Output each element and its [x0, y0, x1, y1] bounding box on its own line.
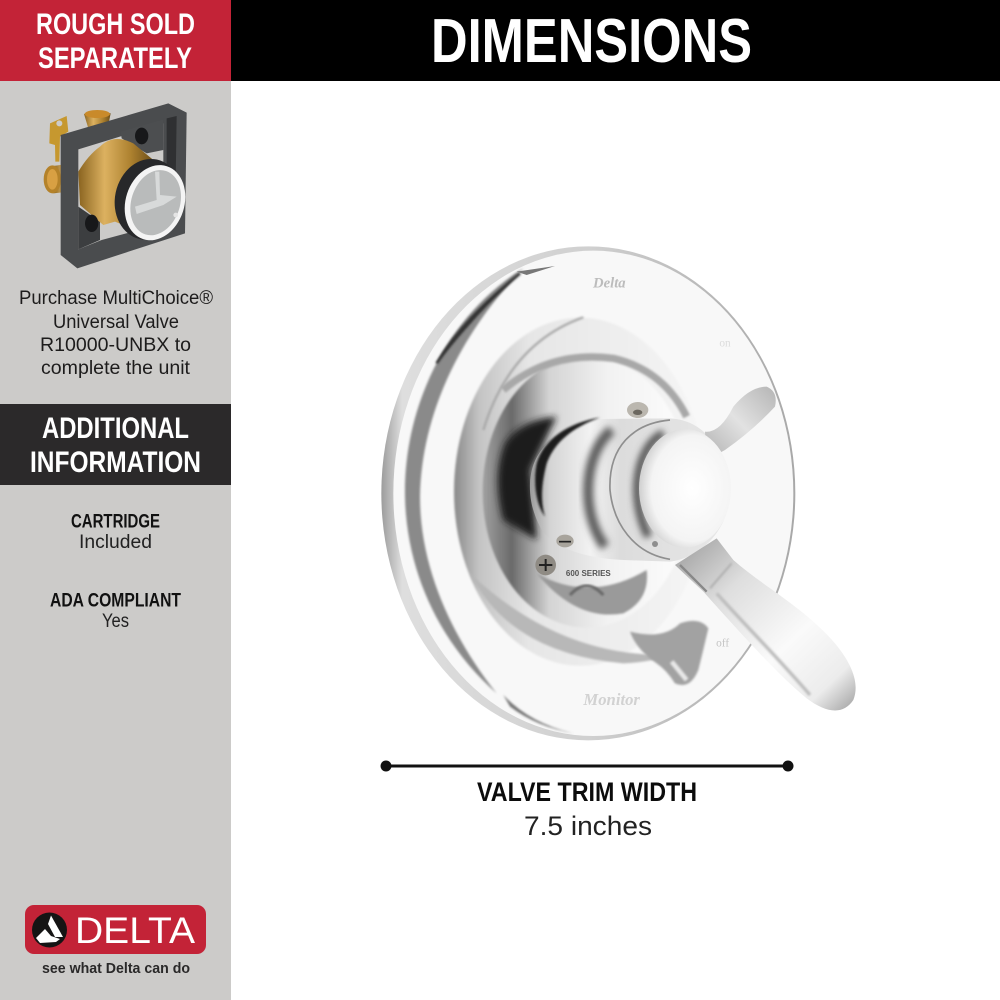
rough-in description: R10000-UNBX to — [40, 335, 191, 356]
inner ring highlight — [483, 317, 583, 430]
cup well arch — [570, 586, 603, 595]
knob small screw — [652, 541, 658, 547]
logo tagline: see what Delta can do — [42, 961, 190, 977]
valve back bracket — [49, 116, 68, 162]
banner heading line two: SEPARATELY — [38, 42, 192, 75]
dimension label: VALVE TRIM WIDTH — [477, 777, 697, 807]
logo mark — [32, 912, 67, 948]
series stamp: 600 SERIES — [566, 569, 611, 578]
spec: cartridge: CARTRIDGE — [71, 510, 160, 532]
engraved on: on — [719, 338, 731, 350]
delta logo — [25, 905, 206, 977]
lower lever — [675, 538, 856, 710]
dimension value: 7.5 inches — [524, 811, 652, 841]
barrel collar outline — [610, 420, 670, 559]
frame inner corner blocks — [78, 207, 100, 249]
faceplate face — [393, 251, 793, 736]
brass valve body — [78, 139, 153, 233]
lever neck shadow — [680, 565, 707, 592]
product image: rough-in valve — [44, 103, 195, 268]
dimension line — [380, 760, 794, 772]
spec: ada compliant: Yes — [102, 611, 129, 632]
banner: rough sold separately — [0, 0, 231, 81]
diverter lever highlight — [672, 662, 687, 680]
faceplate notch reflection — [517, 266, 555, 275]
header title: DIMENSIONS — [431, 7, 752, 76]
rough-in description — [19, 288, 213, 379]
panel: sidebar background — [0, 0, 231, 1000]
frame right inner wall — [167, 116, 177, 225]
inner ring — [454, 318, 706, 666]
lever collar line — [710, 563, 732, 588]
section heading line two: INFORMATION — [30, 446, 201, 479]
right endpoint — [782, 760, 794, 772]
screw: top — [627, 402, 648, 418]
faceplate upper dark reflection — [437, 273, 520, 363]
section heading line one: ADDITIONAL — [42, 412, 189, 445]
diverter lever — [630, 621, 708, 685]
product image: chrome valve trim — [381, 246, 856, 740]
rough-in description: complete the unit — [41, 358, 191, 379]
banner heading line one: ROUGH SOLD — [36, 8, 195, 41]
barrel dark band — [588, 430, 612, 547]
screws — [135, 128, 148, 144]
left endpoint — [380, 760, 392, 772]
rough-in description: Purchase MultiChoice® — [19, 288, 213, 309]
spec: cartridge: Included — [79, 532, 152, 553]
brass left inlet — [53, 162, 83, 193]
spec: ada compliant: ADA COMPLIANT — [50, 590, 181, 612]
spec: cartridge — [71, 510, 160, 553]
engraved delta logo: Delta — [592, 275, 626, 291]
faceplate outer rim — [381, 246, 795, 740]
lever lower shade — [717, 593, 810, 695]
frame outer — [61, 103, 187, 268]
upper lever — [705, 387, 776, 460]
header: dimensions — [231, 0, 1000, 81]
cup top arc — [503, 357, 687, 417]
black cap — [107, 153, 189, 246]
engraved monitor: Monitor — [582, 690, 640, 709]
chrome cup — [483, 356, 691, 628]
frame opening — [78, 123, 163, 249]
white cap ring — [115, 157, 195, 248]
brass top inlet — [84, 111, 111, 147]
handle knob — [639, 429, 731, 548]
banner: additional information — [0, 404, 231, 485]
spec: ada compliant — [50, 590, 181, 632]
barrel knob-side shadow — [637, 433, 663, 537]
handle barrel — [530, 418, 730, 562]
cup lower well — [537, 570, 647, 615]
cap cross detail — [135, 172, 177, 214]
barrel top dark crescent — [535, 417, 600, 517]
logo wordmark: DELTA — [75, 910, 195, 951]
faceplate lower reflection — [503, 695, 573, 733]
rough-in description: Universal Valve — [53, 312, 179, 333]
engraved off: off — [716, 638, 729, 650]
small barrel screw — [556, 535, 574, 547]
faceplate left shading band — [405, 268, 523, 693]
screw: lower — [535, 555, 556, 575]
ring lower shade — [470, 573, 663, 663]
cup dark reflection — [498, 417, 557, 540]
